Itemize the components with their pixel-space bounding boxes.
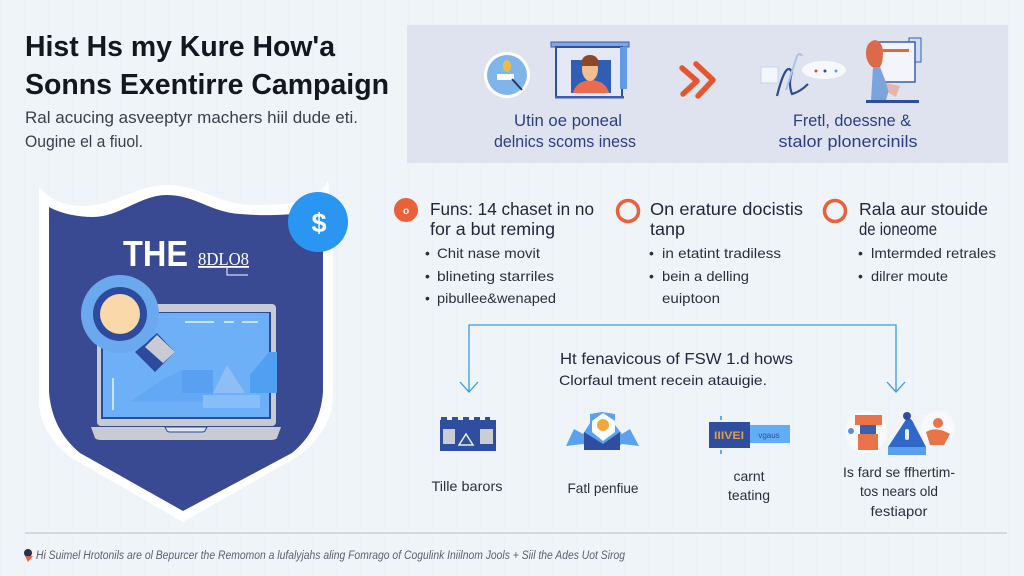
label: left step: delnics scoms iness bbox=[494, 133, 636, 151]
icon: orange dot: o bbox=[403, 206, 409, 217]
bullets: euiptoon bbox=[662, 290, 720, 306]
bullets bbox=[649, 245, 781, 306]
heading bbox=[859, 199, 988, 239]
shield heading bbox=[123, 233, 249, 275]
bullets: dilrer moute bbox=[871, 268, 948, 284]
bullets: • bbox=[425, 290, 430, 306]
shield body bbox=[49, 195, 323, 511]
heading: de ioneome bbox=[859, 219, 937, 239]
title: Sonns Exentirre Campaign bbox=[25, 69, 389, 101]
bullets: • bbox=[649, 245, 654, 261]
panel: shield illustration bbox=[39, 180, 348, 522]
bullets: pibullee&wenaped bbox=[437, 290, 556, 306]
heading: Rala aur stouide bbox=[859, 199, 988, 219]
icon: data sketch cloud bbox=[761, 54, 846, 96]
heading bbox=[430, 199, 594, 239]
bullets: in etatint tradiless bbox=[662, 245, 781, 261]
icon: footer mark bbox=[24, 549, 33, 562]
bullets: • bbox=[425, 268, 430, 284]
subtitle text: Ougine el a fiuol. bbox=[25, 132, 143, 151]
label bbox=[728, 468, 770, 503]
column 3: benefit list bbox=[824, 199, 996, 284]
heading bbox=[650, 199, 803, 239]
bullets: • bbox=[649, 268, 654, 284]
title bbox=[25, 31, 389, 101]
footer text: Hi Suimel Hrotonils are ol Bepurcer the Remomon a lufalyjahs aling Fomrago of Cogulink Iniilnom Jools + Siil the Ades Uot Sirog bbox=[36, 550, 626, 562]
title: Hist Hs my Kure How'a bbox=[25, 31, 336, 63]
icon: dollar badge bbox=[288, 192, 348, 252]
icon: blue tag: vgaus bbox=[758, 431, 780, 440]
label: left step bbox=[494, 112, 636, 151]
bullets: bein a delling bbox=[662, 268, 749, 284]
item: festival icon bbox=[843, 411, 955, 519]
label: Is fard se ffhertim- bbox=[843, 464, 955, 480]
bullets: lmtermded retrales bbox=[871, 245, 996, 261]
bullets: • bbox=[858, 268, 863, 284]
item: crest icon bbox=[566, 412, 639, 496]
label: Tille barors bbox=[432, 478, 502, 494]
icon: laptop bbox=[91, 304, 281, 440]
bullets: • bbox=[858, 245, 863, 261]
icon: orange ring bbox=[618, 200, 638, 222]
heading: tanp bbox=[650, 219, 685, 239]
icon: blue tag bbox=[709, 416, 790, 454]
subtitle text: Ral acucing asveeptyr machers hiil dude eti. bbox=[25, 108, 358, 127]
panel: process banner bbox=[407, 25, 1008, 163]
icon: dark blue block bbox=[440, 417, 496, 451]
bullets: blineting starriles bbox=[437, 268, 554, 284]
label: right step: Fretl, doessne & bbox=[793, 112, 911, 130]
shield heading: THE bbox=[123, 233, 188, 274]
icon: tent with figures bbox=[845, 411, 955, 455]
label: right step bbox=[778, 112, 918, 151]
icon: blue tag: IIIVEI bbox=[714, 430, 744, 442]
heading: On erature docistis bbox=[650, 199, 803, 219]
icon: round magnifier badge bbox=[484, 52, 530, 98]
label: tos nears old bbox=[860, 483, 938, 499]
label: carnt bbox=[733, 468, 765, 484]
item: banner icon bbox=[432, 417, 502, 494]
connector caption: Ht fenavicous of FSW 1.d hows bbox=[560, 351, 793, 368]
icon: magnifier bbox=[81, 275, 175, 372]
label bbox=[843, 464, 955, 519]
label: Fatl penfiue bbox=[568, 480, 639, 496]
column 1: benefit list bbox=[394, 198, 594, 306]
footer bbox=[24, 549, 626, 562]
arrow: double chevron bbox=[682, 64, 713, 96]
column 2: benefit list bbox=[618, 199, 803, 306]
bullets: • bbox=[425, 245, 430, 261]
arrow: branching connector bbox=[460, 325, 905, 392]
item: tag icon bbox=[709, 416, 790, 503]
heading: Funs: 14 chaset in no bbox=[430, 199, 594, 219]
bullets: Chit nase movit bbox=[437, 245, 540, 261]
label: festiapor bbox=[870, 503, 928, 519]
bullets bbox=[858, 245, 996, 284]
heading: for a but reming bbox=[430, 219, 555, 239]
bullets bbox=[425, 245, 556, 306]
icon: person in window bbox=[551, 42, 629, 98]
connector caption: Clorfaul tment recein atauigie. bbox=[559, 372, 767, 388]
icon: crest with flame bbox=[566, 412, 639, 450]
connector caption bbox=[559, 351, 793, 388]
icon: orange ring bbox=[824, 200, 846, 222]
label: left step: Utin oe poneal bbox=[514, 112, 622, 130]
icon: dollar badge: $ bbox=[311, 208, 327, 238]
shield heading: 8DLO8 bbox=[198, 249, 249, 269]
divider bbox=[25, 532, 1007, 534]
subtitle text bbox=[25, 108, 358, 151]
label: right step: stalor plonercinils bbox=[778, 133, 918, 151]
icon: document and figure bbox=[866, 38, 921, 103]
shield outline bbox=[39, 180, 333, 522]
label: teating bbox=[728, 487, 770, 503]
icon: orange dot bbox=[394, 198, 418, 222]
